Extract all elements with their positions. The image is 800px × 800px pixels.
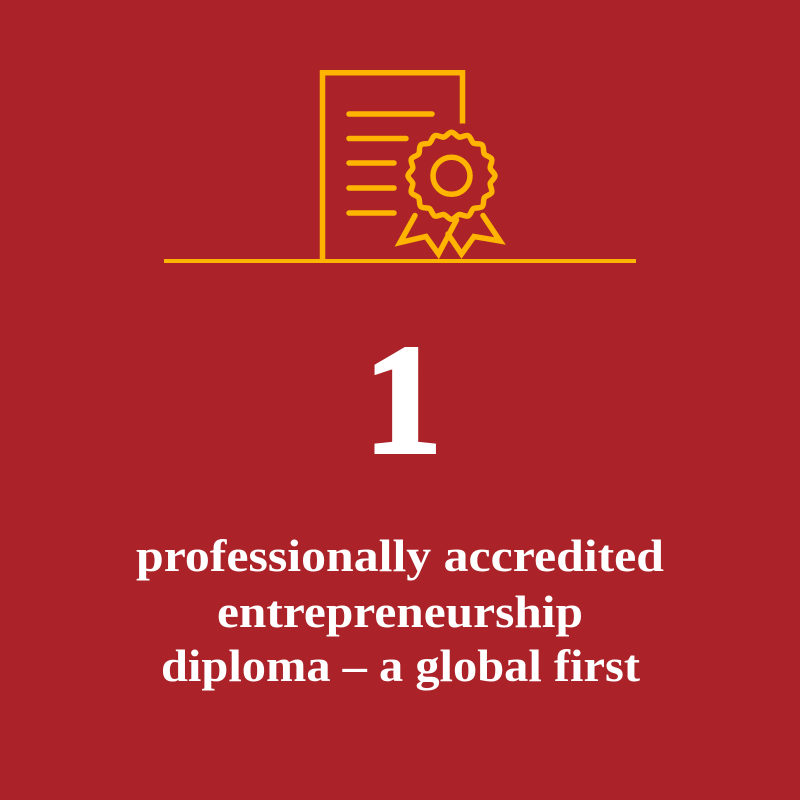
rosette inner circle xyxy=(433,157,470,194)
caption xyxy=(136,530,664,691)
caption line 3: diploma – a global first xyxy=(161,640,641,691)
rosette seal edge xyxy=(408,132,495,219)
right ribbon xyxy=(448,216,500,254)
document text lines xyxy=(349,114,432,213)
caption line 1: professionally accredited xyxy=(136,530,664,581)
baseline rule xyxy=(164,259,636,263)
left ribbon xyxy=(400,216,456,254)
icon: accredited document with rosette xyxy=(164,73,636,261)
document outline xyxy=(322,73,462,261)
big number: 1 xyxy=(364,313,442,486)
caption line 2: entrepreneurship xyxy=(217,586,583,637)
